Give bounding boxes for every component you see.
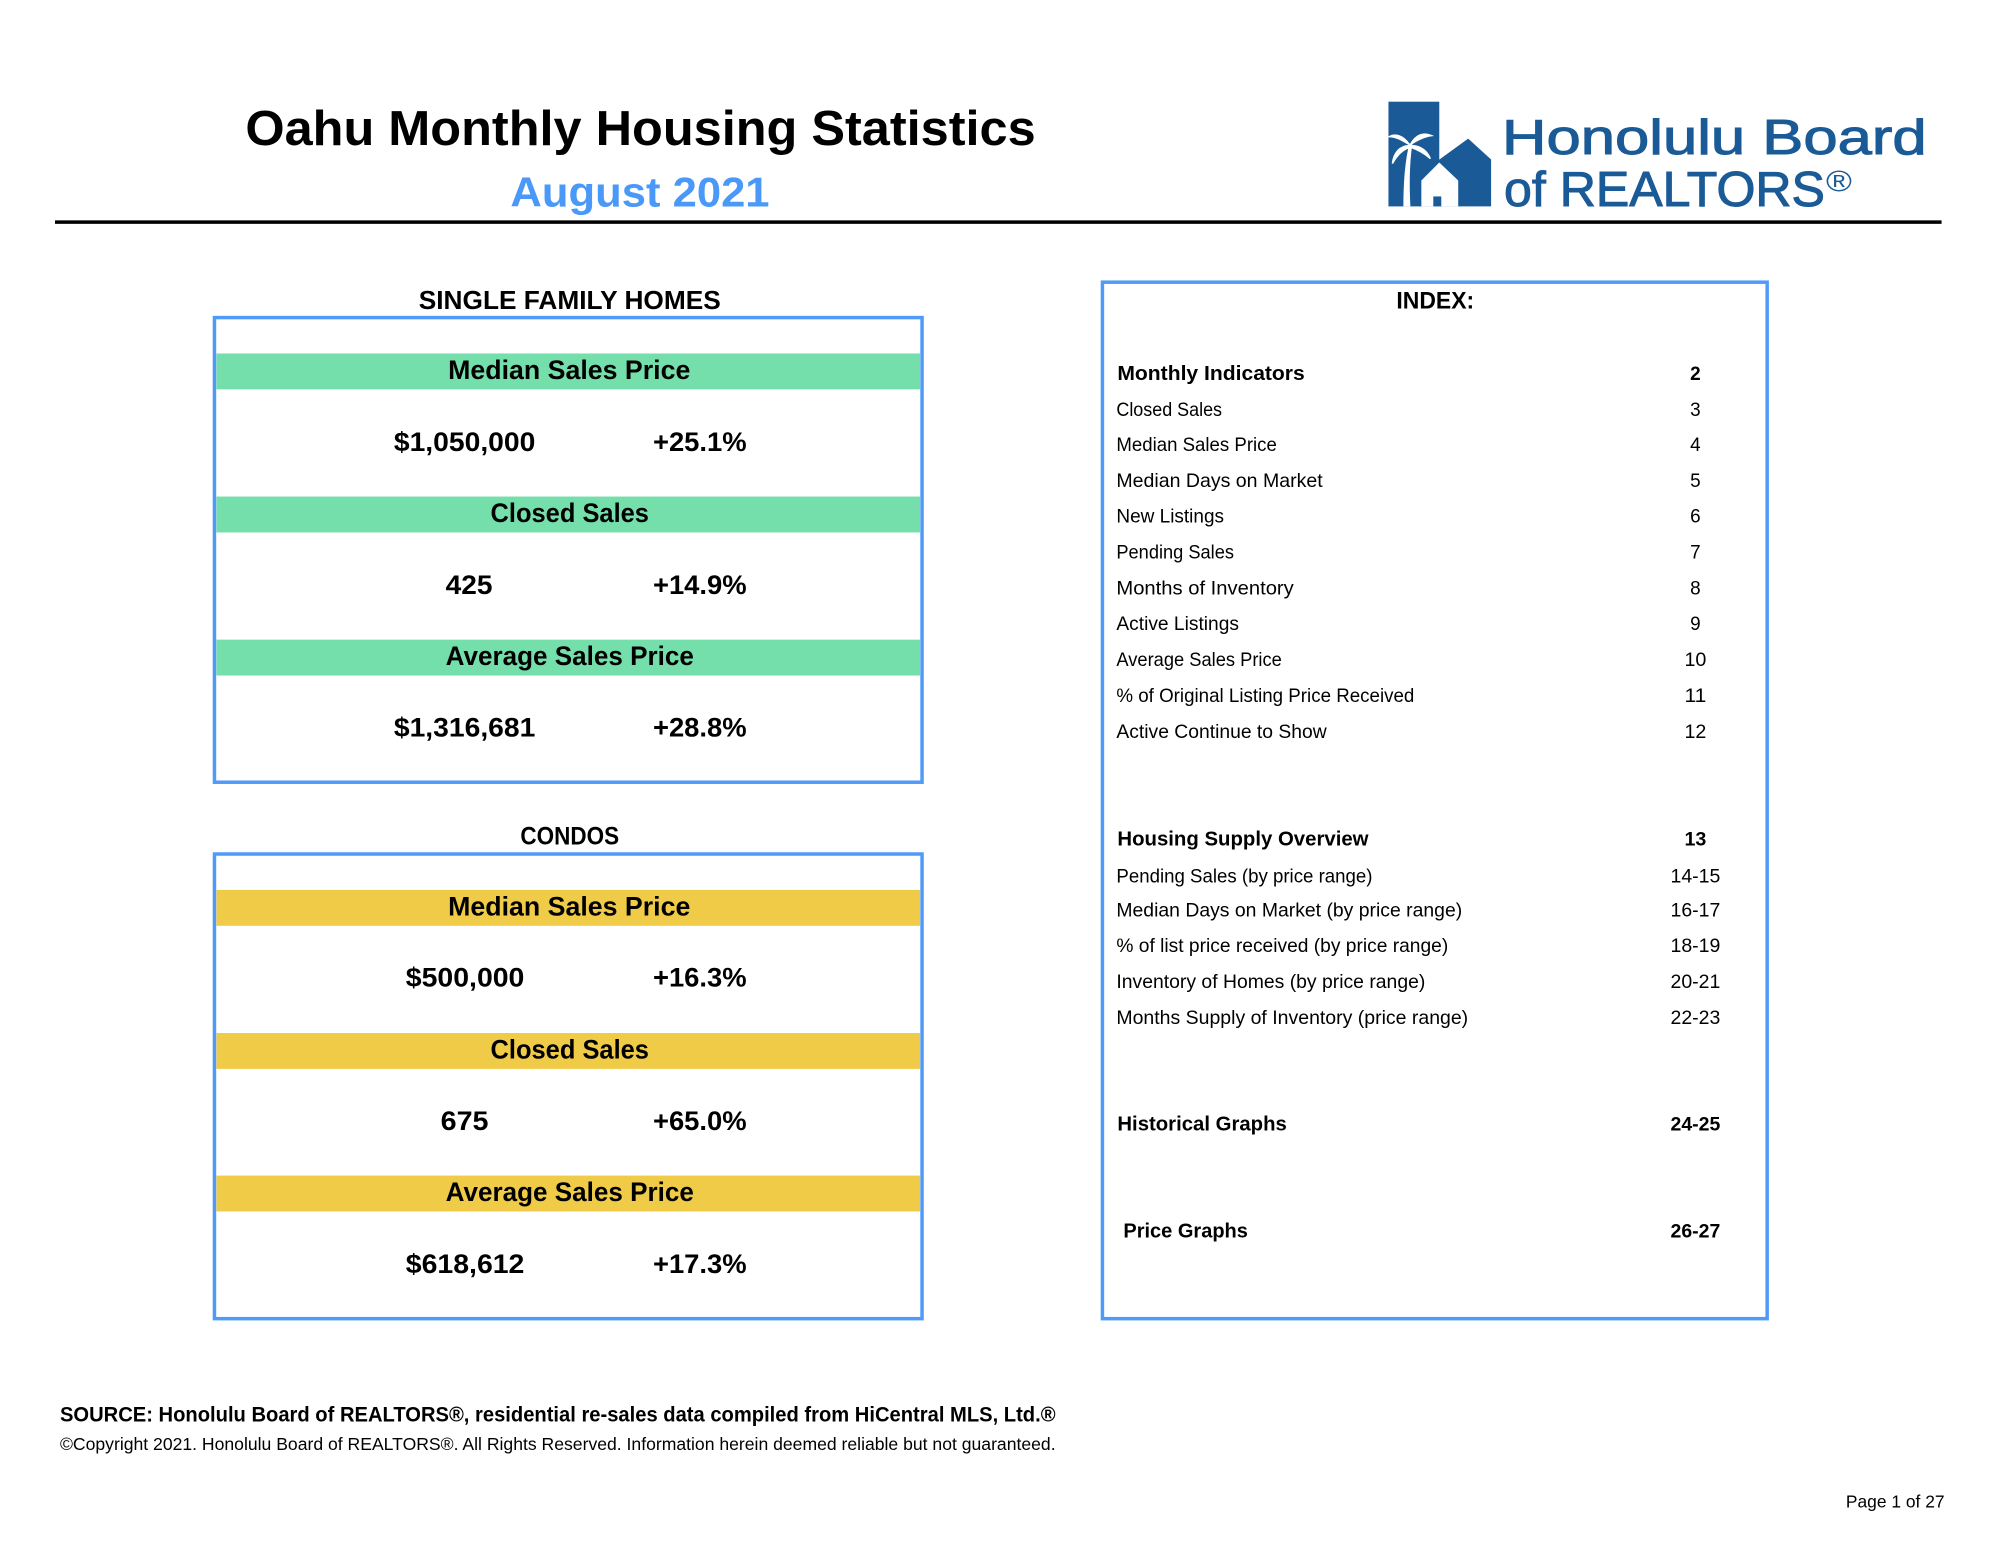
value: median sales price: $1,050,000 [394,427,535,457]
value: average sales price: +17.3% [653,1249,747,1279]
section: historical graphs: Historical Graphs [1117,1114,1287,1136]
section: monthly indicators: 8 [1690,578,1701,599]
source note: SOURCE: Honolulu Board of REALTORS®, residential re-sales data compiled from HiCentral MLS, Ltd.® [60,1403,1056,1426]
section: housing supply overview [1116,829,1720,1029]
section: monthly indicators: 5 [1690,471,1701,492]
section: housing supply overview: 20-21 [1670,972,1720,993]
value: median sales price [394,427,747,457]
value: closed sales: 425 [446,570,493,600]
section: monthly indicators: Median Days on Market [1116,471,1323,492]
bar: average sales price [216,640,920,676]
section: monthly indicators: Pending Sales [1116,542,1234,563]
section: housing supply overview: 16-17 [1670,900,1720,921]
bar: median sales price: Median Sales Price [448,355,690,385]
value: closed sales: +65.0% [653,1106,747,1136]
logo text: line two: of REALTORS [1504,163,1825,217]
section: housing supply overview: Housing Supply Overview [1117,829,1369,851]
value: closed sales [441,1106,747,1136]
section: monthly indicators: Median Sales Price [1116,435,1277,456]
section: monthly indicators: 11 [1684,686,1706,707]
value: average sales price [394,712,747,742]
bar: closed sales: Closed Sales [491,498,649,528]
panel: index [1102,282,1767,1319]
panel: single family homes [214,318,922,782]
value: closed sales: +14.9% [653,570,747,600]
section: monthly indicators: 2 [1690,364,1701,385]
section: monthly indicators: 4 [1690,435,1701,456]
section: monthly indicators: Active Listings [1116,614,1239,635]
section: housing supply overview: Pending Sales (by price range) [1116,866,1373,887]
section: monthly indicators: 10 [1684,650,1706,671]
value: average sales price [406,1249,747,1279]
section: housing supply overview: Months Supply of Inventory (price range) [1116,1008,1468,1029]
bar: average sales price: Average Sales Price [446,641,694,671]
title: Oahu Monthly Housing Statistics [245,102,1036,156]
section: monthly indicators: 3 [1690,400,1701,421]
panel: condos [214,854,922,1319]
heading: single family homes: SINGLE FAMILY HOMES [419,287,721,315]
section: monthly indicators [1116,363,1706,743]
bar: closed sales [216,497,920,532]
value: closed sales: 675 [441,1106,489,1136]
value: average sales price: $1,316,681 [394,712,535,742]
section: historical graphs: 24-25 [1670,1115,1720,1136]
value: median sales price [406,963,747,993]
value: median sales price: +25.1% [653,427,747,457]
bar: average sales price [216,1176,920,1211]
bar: median sales price: Median Sales Price [448,891,690,921]
heading: condos: CONDOS [520,823,619,851]
icon: buildings, house and palm [1388,102,1491,206]
logo text: registered mark: ® [1826,165,1852,198]
section: housing supply overview: 13 [1684,830,1706,851]
section: housing supply overview: Inventory of Homes (by price range) [1116,972,1425,993]
section: historical graphs [1117,1114,1720,1136]
bar: average sales price: Average Sales Price [446,1177,694,1207]
bar: median sales price [216,890,920,926]
section: monthly indicators: Active Continue to Show [1116,722,1327,743]
section: monthly indicators: Monthly Indicators [1117,363,1305,385]
section: monthly indicators: New Listings [1116,506,1224,527]
section: housing supply overview: Median Days on Market (by price range) [1116,900,1462,921]
section: monthly indicators: 12 [1684,722,1706,743]
value: average sales price: +28.8% [653,712,747,742]
section: monthly indicators: Closed Sales [1116,400,1222,421]
logo: Honolulu Board of REALTORS [1388,102,1927,217]
section: housing supply overview: 18-19 [1670,936,1720,957]
section: housing supply overview: % of list price received (by price range) [1116,936,1448,957]
section: price graphs [1123,1220,1720,1242]
subtitle: month: August 2021 [510,168,770,215]
copyright note: ©Copyright 2021. Honolulu Board of REALTORS®. All Rights Reserved. Information herein deemed reliable but not guaranteed. [60,1434,1056,1454]
value: closed sales [446,570,747,600]
section: price graphs: Price Graphs [1123,1220,1248,1242]
section: housing supply overview: 14-15 [1670,866,1720,887]
section: housing supply overview: 22-23 [1670,1008,1720,1029]
page number: Page 1 of 27 [1846,1492,1945,1512]
value: median sales price: $500,000 [406,963,524,993]
section: monthly indicators: 9 [1690,614,1701,635]
logo text: line one: Honolulu Board [1502,111,1927,165]
section: price graphs: 26-27 [1670,1221,1720,1242]
bar: closed sales [216,1033,920,1069]
section: monthly indicators: Months of Inventory [1116,578,1294,599]
value: average sales price: $618,612 [406,1249,524,1279]
bar: median sales price [216,353,920,389]
section: monthly indicators: 6 [1690,506,1701,527]
section: monthly indicators: % of Original Listing Price Received [1116,686,1414,707]
section: monthly indicators: 7 [1690,542,1701,563]
index heading: INDEX: [1396,288,1474,315]
bar: closed sales: Closed Sales [491,1034,649,1064]
value: median sales price: +16.3% [653,963,747,993]
section: monthly indicators: Average Sales Price [1116,650,1282,671]
